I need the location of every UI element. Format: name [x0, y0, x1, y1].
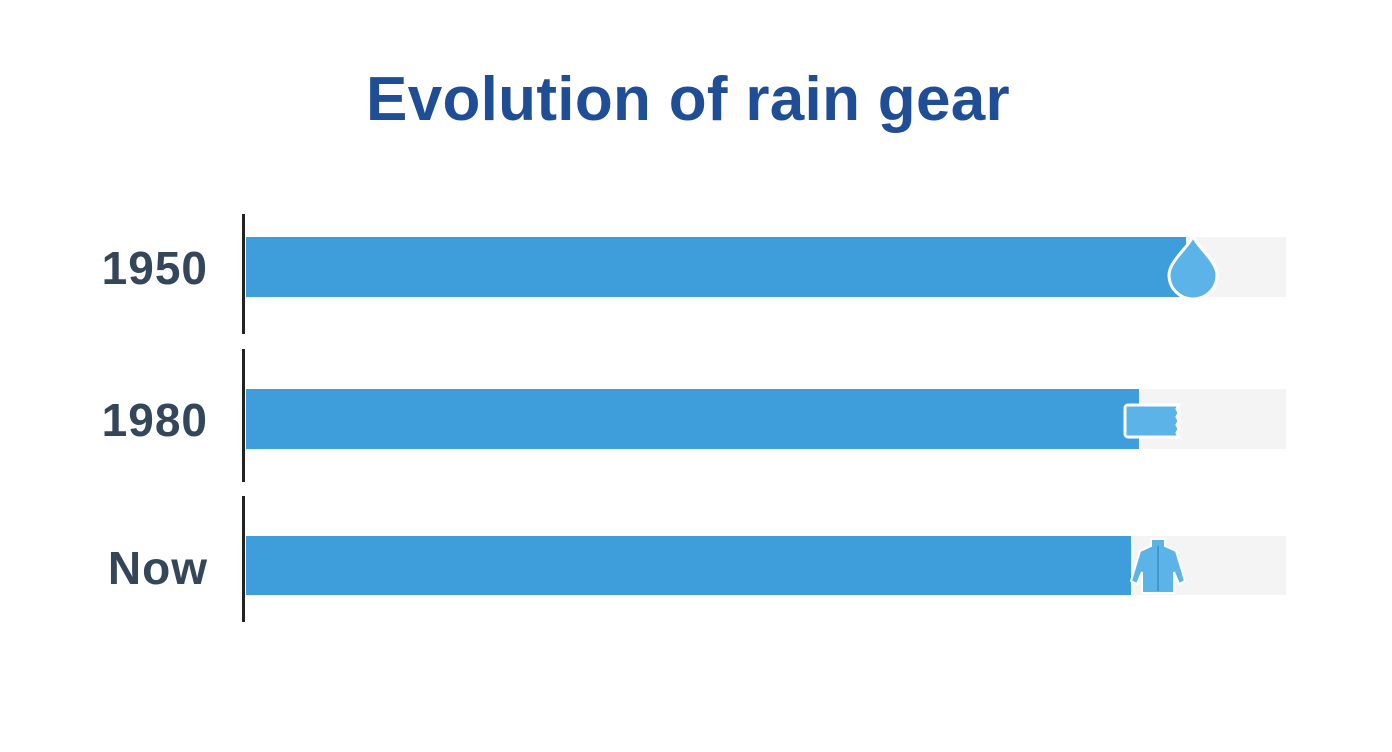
icon: rectangle fabric — [1124, 404, 1181, 438]
icon: water drop — [1168, 237, 1218, 298]
axis segment 1950 — [242, 214, 245, 334]
axis segment 1980 — [242, 349, 245, 482]
icon: jacket — [1130, 538, 1186, 594]
label Now: Now — [108, 542, 208, 594]
title: Evolution of rain gear — [366, 65, 1010, 134]
bar 1950 — [246, 237, 1286, 297]
label 1950: 1950 — [102, 242, 208, 294]
bar 1980 — [246, 389, 1286, 449]
bar Now — [246, 536, 1286, 595]
label 1980: 1980 — [102, 394, 208, 446]
axis segment Now — [242, 496, 245, 622]
